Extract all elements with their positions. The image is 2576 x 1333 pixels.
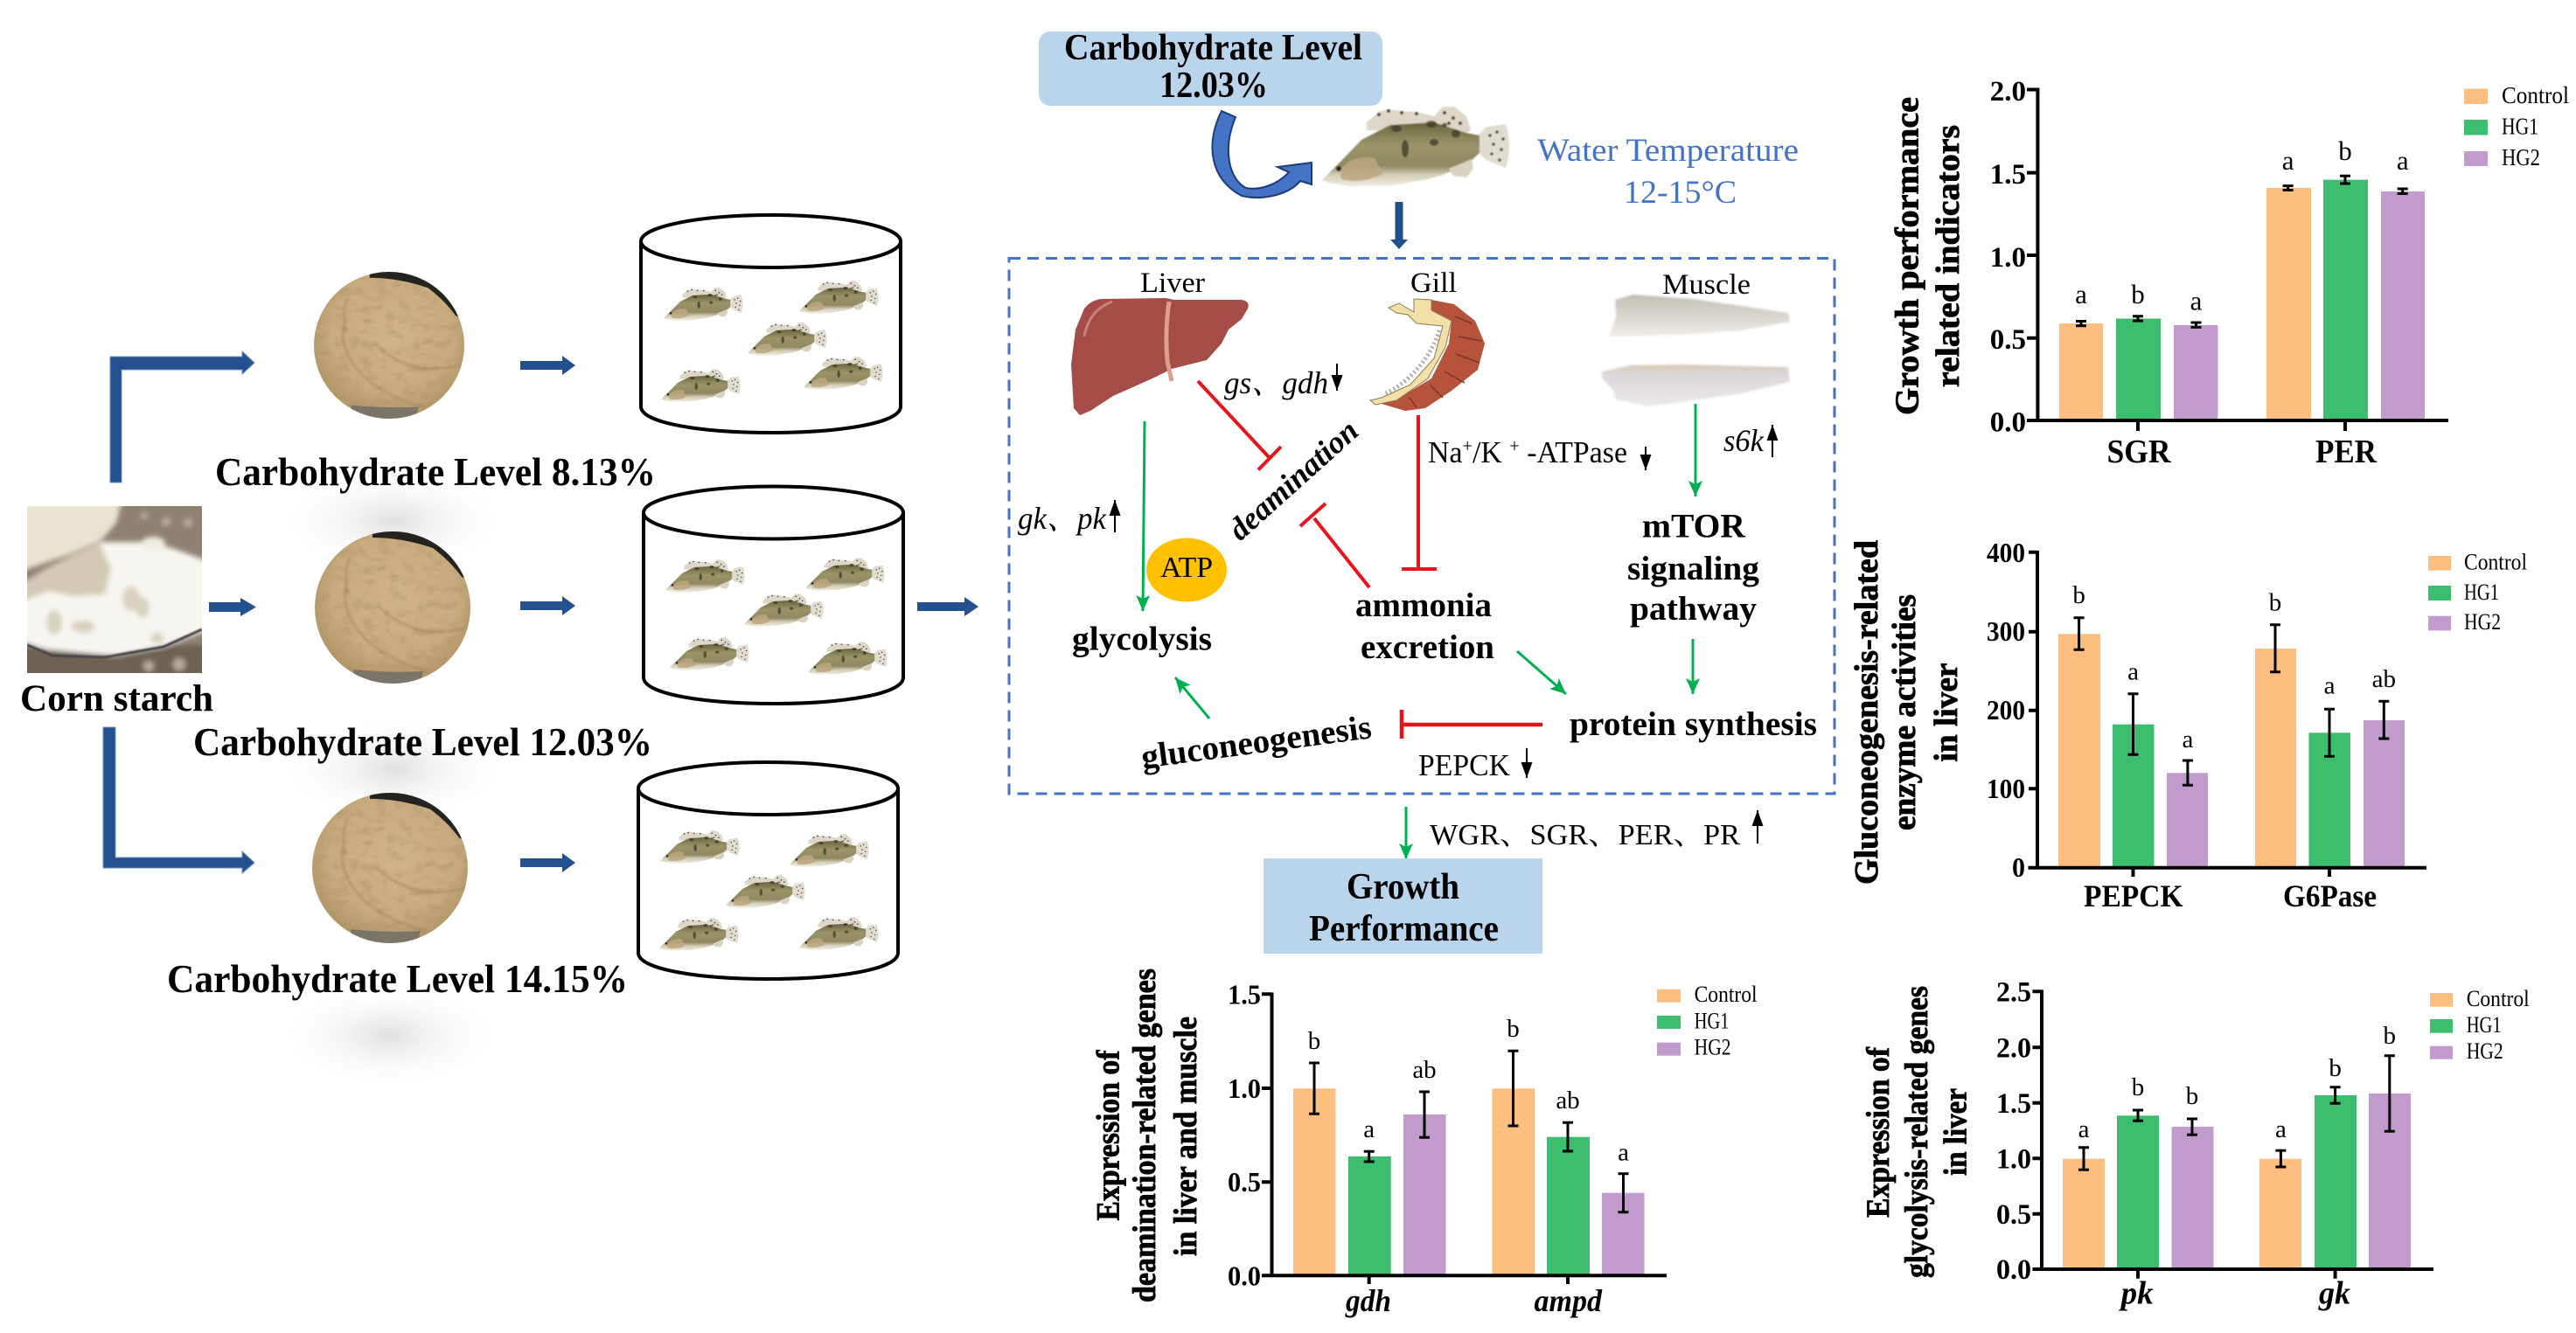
significance letters: a xyxy=(2075,279,2087,309)
bars xyxy=(1293,1088,1644,1275)
x labels: PER xyxy=(2315,434,2378,470)
y axis title: in liver xyxy=(1938,1088,1974,1176)
arrow: middle xyxy=(209,598,256,616)
dashed frame xyxy=(1009,259,1835,794)
label: water temperature xyxy=(1537,133,1799,211)
legend: Control xyxy=(2502,82,2569,108)
legend: HG2 xyxy=(1695,1035,1731,1060)
callout: carbohydrate level box xyxy=(1039,28,1382,106)
arrow: tanks to mechanism xyxy=(917,597,978,616)
y tick labels xyxy=(1987,537,2025,883)
axes xyxy=(2029,551,2426,877)
axes xyxy=(1262,993,1667,1284)
y tick labels: 300 xyxy=(1987,615,2025,647)
legend: HG2 xyxy=(2502,144,2540,170)
significance letters xyxy=(2078,1022,2396,1143)
significance letters: b xyxy=(2329,1054,2342,1082)
callout: carbohydrate level box: Carbohydrate Level xyxy=(1064,28,1362,68)
arrow: fish to mechanism xyxy=(1390,202,1408,249)
arrow: s6k up xyxy=(1772,425,1773,457)
significance letters xyxy=(2072,581,2396,753)
label: water temperature: 12-15°C xyxy=(1624,175,1737,211)
disc: feed 14.15% xyxy=(312,793,468,943)
icon: fish xyxy=(1322,107,1509,186)
text: Na K ATPase: Na xyxy=(1428,435,1464,469)
arrow: PEPCK down xyxy=(1526,748,1528,778)
x labels: pk xyxy=(2119,1276,2154,1312)
axes xyxy=(2032,989,2433,1279)
significance letters xyxy=(1308,1015,1629,1167)
error bars xyxy=(1309,1051,1628,1212)
legend: HG1 xyxy=(2502,114,2538,140)
significance letters: a xyxy=(2078,1115,2090,1143)
text: Na K ATPase: + xyxy=(1462,435,1472,456)
icon: muscle fillets xyxy=(1602,295,1790,406)
inhibition: liver to deamination xyxy=(1198,381,1281,470)
inhibition: protein synthesis to gluconeogenesis xyxy=(1402,710,1542,739)
arrow: muscle to mTOR xyxy=(1695,404,1696,496)
x labels xyxy=(2107,434,2378,470)
legend: Control xyxy=(1695,982,1758,1007)
y axis title xyxy=(1861,986,1974,1278)
x labels: G6Pase xyxy=(2283,878,2377,913)
error bars xyxy=(2078,1056,2395,1170)
text: deamination: deamination xyxy=(1222,413,1365,547)
text: ammonia excretion: ammonia xyxy=(1355,587,1492,624)
y tick labels: 0.5 xyxy=(1990,324,2026,356)
arrow: liver to glycolysis xyxy=(1143,421,1145,611)
tank 2 with fish xyxy=(644,486,903,704)
background soft shadows xyxy=(275,467,512,1090)
text: protein synthesis: protein synthesis xyxy=(1570,705,1817,743)
y axis title: in liver xyxy=(1928,663,1965,762)
legend: Control xyxy=(2467,986,2530,1011)
bars xyxy=(2058,634,2405,868)
significance letters: a xyxy=(1363,1115,1375,1143)
y axis title: deamination-related genes xyxy=(1127,969,1163,1302)
label: level 12.03: Carbohydrate Level 12.03% xyxy=(193,719,652,764)
label: muscle: Muscle xyxy=(1662,269,1751,301)
legend xyxy=(2428,550,2527,635)
arrow: mTOR to protein synthesis xyxy=(1691,639,1695,694)
legend xyxy=(2430,986,2530,1064)
callout: growth performance box xyxy=(1264,858,1542,954)
y tick labels: 0 xyxy=(2012,851,2025,883)
arrow: upward elbow xyxy=(110,351,254,483)
significance letters: b xyxy=(2186,1082,2198,1110)
y axis title: glycolysis-related genes xyxy=(1899,986,1935,1278)
arrow: gluconeogenesis to glycolysis xyxy=(1175,677,1209,719)
y tick labels: 1.5 xyxy=(1990,159,2026,191)
significance letters: a xyxy=(1618,1139,1629,1167)
y tick labels: 1.5 xyxy=(1228,979,1261,1010)
x labels: SGR xyxy=(2107,434,2171,470)
ATP circle xyxy=(1146,538,1227,601)
x labels xyxy=(1345,1283,1603,1318)
x labels: gk xyxy=(2318,1276,2350,1312)
bar chart: glycolysis genes xyxy=(1861,977,2530,1312)
legend: HG2 xyxy=(2464,609,2501,635)
legend: HG1 xyxy=(2464,580,2499,605)
callout: growth performance box: Growth xyxy=(1347,867,1459,907)
text: mTOR signaling pathway: signaling xyxy=(1627,550,1759,587)
y tick labels: 1.0 xyxy=(1228,1073,1261,1104)
bar chart: gluconeogenesis enzymes xyxy=(1848,537,2527,913)
x labels xyxy=(2119,1276,2350,1312)
icon: liver xyxy=(1071,298,1249,415)
significance letters: a xyxy=(2190,285,2203,316)
y axis title: enzyme activities xyxy=(1886,594,1923,830)
x labels: gdh xyxy=(1345,1283,1391,1318)
significance letters: ab xyxy=(1412,1056,1437,1084)
bars xyxy=(2059,180,2425,420)
significance letters: a xyxy=(2282,145,2294,176)
significance letters: a xyxy=(2275,1115,2287,1143)
y axis title: Expression of xyxy=(1861,1046,1897,1218)
text: glycolysis: glycolysis xyxy=(1072,621,1212,657)
label: level 8.13: Carbohydrate Level 8.13% xyxy=(215,449,656,494)
label: water temperature: Water Temperature xyxy=(1537,133,1799,169)
arrows: disc to tank xyxy=(520,356,575,872)
text: gk pk up: gk、pk xyxy=(1018,501,1107,536)
significance letters: b xyxy=(2072,581,2085,609)
text: Na K ATPase: /K xyxy=(1472,435,1509,469)
text: PEPCK down: PEPCK xyxy=(1418,748,1510,782)
text: ammonia excretion: excretion xyxy=(1361,628,1494,666)
y tick labels: 2.5 xyxy=(1996,977,2031,1009)
y tick labels: 200 xyxy=(1987,694,2025,726)
arrow: growth indices up xyxy=(1757,810,1758,844)
label: corn starch: Corn starch xyxy=(20,678,213,719)
disc: feed 8.13% xyxy=(314,272,464,419)
text: s6k up: s6k xyxy=(1723,423,1765,458)
y axis title: in liver and muscle xyxy=(1168,1017,1204,1256)
icon: gill xyxy=(1370,299,1485,411)
y tick labels: 2.0 xyxy=(1990,76,2026,108)
tank 1 with fish xyxy=(641,215,901,433)
label: gill: Gill xyxy=(1410,267,1457,299)
error bars xyxy=(2076,176,2408,327)
arrow: ammonia to protein synthesis xyxy=(1517,651,1566,694)
y tick labels: 0.0 xyxy=(1990,407,2026,439)
significance letters: b xyxy=(2269,588,2281,616)
y tick labels: 0.5 xyxy=(1996,1199,2031,1231)
legend: HG2 xyxy=(2467,1038,2503,1064)
significance letters: b xyxy=(1308,1027,1320,1055)
text: ammonia excretion xyxy=(1355,587,1494,666)
arrow: mechanism to growth performance xyxy=(1404,807,1408,859)
significance letters: a xyxy=(2397,145,2409,176)
y axis title: Expression of xyxy=(1091,1050,1126,1220)
ATP circle: ATP xyxy=(1160,552,1213,584)
text: growth indices: WGR、SGR、PER、PR xyxy=(1430,819,1740,851)
significance letters: a xyxy=(2127,658,2139,686)
significance letters: b xyxy=(2338,135,2352,166)
callout: growth performance box: Performance xyxy=(1309,909,1499,949)
y tick labels: 1.0 xyxy=(1990,242,2026,274)
y tick labels: 0.5 xyxy=(1228,1166,1261,1198)
y tick labels: 100 xyxy=(1987,773,2025,804)
significance letters: a xyxy=(2324,671,2336,699)
label: level 14.15: Carbohydrate Level 14.15% xyxy=(167,956,628,1001)
y tick labels xyxy=(1996,977,2031,1286)
y tick labels xyxy=(1228,979,1261,1292)
y axis title: Gluconeogenesis-related xyxy=(1848,540,1885,885)
text: gs gdh down: gs、gdh xyxy=(1224,365,1328,400)
legend xyxy=(1657,982,1758,1060)
text: Na K ATPase: + xyxy=(1509,435,1520,456)
text: mTOR signaling pathway xyxy=(1627,507,1759,628)
panel: mechanism xyxy=(1009,259,1835,794)
significance letters: b xyxy=(2384,1022,2396,1050)
bar chart: growth performance xyxy=(1889,76,2569,470)
legend: HG1 xyxy=(1695,1009,1730,1034)
y tick labels xyxy=(1990,76,2026,439)
arrow: gk pk up xyxy=(1114,500,1116,532)
text: gluconeogenesis: gluconeogenesis xyxy=(1139,708,1374,776)
y axis title xyxy=(1848,540,1965,885)
text: mTOR signaling pathway: mTOR xyxy=(1642,507,1746,545)
y tick labels: 2.0 xyxy=(1996,1033,2031,1065)
significance letters: b xyxy=(2132,1073,2144,1101)
x labels: PEPCK xyxy=(2084,878,2183,913)
y axis title: Growth performance xyxy=(1889,97,1925,415)
y tick labels: 1.0 xyxy=(1996,1143,2031,1175)
y tick labels: 400 xyxy=(1987,537,2025,568)
significance letters: b xyxy=(2131,279,2145,309)
significance letters: ab xyxy=(2372,665,2396,693)
arrow: downward elbow xyxy=(103,727,254,873)
significance letters: b xyxy=(1507,1015,1520,1043)
arrow: gs gdh down xyxy=(1336,364,1338,391)
arrow: ATPase down xyxy=(1645,447,1647,470)
inhibition: ammonia to deamination xyxy=(1300,503,1369,587)
significance letters: a xyxy=(2182,726,2193,753)
y axis title xyxy=(1889,97,1967,415)
inhibition: gill to ammonia xyxy=(1402,415,1437,569)
x labels: ampd xyxy=(1534,1283,1603,1318)
text: Na K ATPase: -ATPase xyxy=(1520,435,1627,469)
bar chart: deamination genes xyxy=(1091,969,1758,1318)
tank 3 with fish xyxy=(638,762,898,979)
y axis title xyxy=(1091,969,1204,1302)
axes xyxy=(2027,87,2448,431)
y axis title: related indicators xyxy=(1930,125,1967,387)
significance letters: ab xyxy=(1556,1087,1580,1114)
error bars xyxy=(2074,618,2389,785)
bars xyxy=(2063,1093,2411,1269)
text: mTOR signaling pathway: pathway xyxy=(1630,590,1757,628)
legend xyxy=(2464,82,2569,170)
legend: HG1 xyxy=(2467,1012,2502,1038)
y tick labels: 1.5 xyxy=(1996,1088,2031,1120)
significance letters xyxy=(2075,135,2409,316)
panel: experimental design xyxy=(17,215,978,1090)
y tick labels: 0.0 xyxy=(1996,1254,2031,1286)
callout: carbohydrate level box: 12.03% xyxy=(1159,66,1268,106)
disc: feed 12.03% xyxy=(315,531,470,684)
y tick labels: 0.0 xyxy=(1228,1260,1261,1292)
photo: corn starch xyxy=(27,506,202,673)
x labels xyxy=(2084,878,2377,913)
icon: curved arrow xyxy=(1212,111,1312,198)
label: liver: Liver xyxy=(1140,267,1205,299)
legend: Control xyxy=(2464,550,2527,575)
